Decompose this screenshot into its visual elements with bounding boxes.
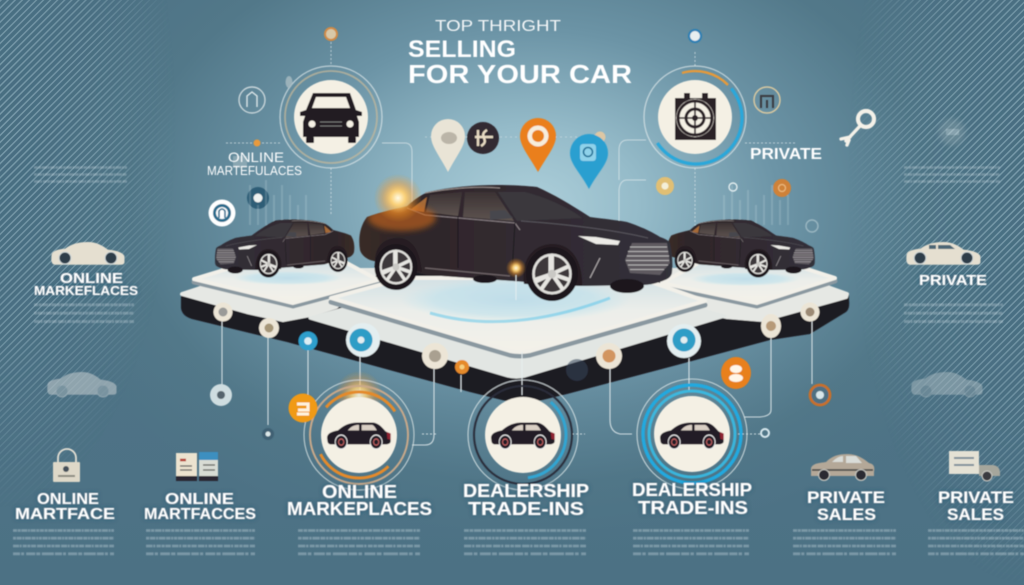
glow: rear light flare — [374, 174, 422, 222]
right-side column: PRIVATE — [919, 272, 987, 289]
title — [408, 18, 632, 89]
text column: online marketplaces 2: MARTFACCES — [144, 506, 256, 523]
title: TOP THRIGHT — [435, 18, 561, 35]
rear orange reflection — [368, 205, 436, 231]
top-right feature: dial badge — [631, 53, 761, 183]
main car — [359, 185, 672, 301]
left-side column: MARKEFLACES — [34, 283, 138, 298]
platform: left tier — [182, 262, 380, 320]
label: online marketplaces upper: ONLINE — [228, 149, 284, 165]
left-side column — [34, 168, 138, 397]
faint vertical bars behind side cars — [250, 180, 788, 225]
connector lines upper — [226, 42, 795, 235]
text column: private sales 1: PRIVATE — [807, 489, 885, 507]
pin: beige — [431, 119, 465, 172]
pin: dark round — [467, 122, 499, 154]
text column: private sales 2: SALES — [947, 506, 1004, 524]
top-left feature: car front badge — [280, 66, 382, 168]
icon: documents — [176, 452, 218, 481]
text column: dealership 1: DEALERSHIP — [463, 480, 589, 501]
faint dim disc on base — [566, 359, 588, 381]
text column: online marketplaces 2 — [144, 452, 256, 554]
icon: delivery truck — [949, 451, 1000, 481]
text column: private sales 2: PRIVATE — [938, 489, 1014, 507]
icon: hatchback — [327, 423, 391, 449]
text column: private sales 1 — [793, 454, 896, 554]
icon: beige car — [51, 242, 124, 265]
text column: dealership 2: DEALERSHIP — [632, 480, 752, 500]
pin: orange — [520, 118, 556, 172]
platform: dark base — [181, 270, 849, 405]
icon: dial — [675, 93, 716, 140]
icon: lock tag — [53, 449, 80, 482]
small upper nodes and icons — [208, 28, 818, 232]
side car right — [668, 220, 815, 278]
text column: dealership 1 — [463, 480, 589, 554]
icon: orange badge — [288, 394, 318, 422]
title: FOR YOUR CAR — [408, 59, 632, 89]
bottom circle: dealership right — [637, 379, 747, 489]
label: online marketplaces upper: MARTEFULACES — [207, 163, 302, 178]
right-side column — [904, 168, 1003, 397]
icon: faint emblem — [939, 119, 965, 145]
text column: online marketplaces 2: ONLINE — [165, 491, 234, 508]
icon: key — [841, 111, 874, 145]
title: SELLING — [408, 36, 516, 63]
icon: faded car — [47, 372, 117, 397]
lower connector lines — [222, 275, 812, 445]
icon: car front — [300, 93, 362, 143]
text column: online marketplace 1: ONLINE — [37, 491, 99, 508]
label: private upper: PRIVATE — [750, 146, 822, 163]
bottom circle: online marketplaces — [298, 371, 420, 496]
text column: online marketplaces 3: ONLINE — [322, 481, 397, 502]
pin: blue — [570, 134, 608, 189]
bottom circle: dealership centre — [462, 374, 584, 496]
text column: private sales 2 — [928, 451, 1024, 554]
side car left — [215, 220, 354, 278]
text column: online marketplace 1: MARTFACE — [15, 506, 115, 523]
text column: online marketplaces 3 — [287, 481, 432, 554]
text column: private sales 1: SALES — [817, 506, 876, 524]
text column: dealership 1: TRADE-INS — [468, 498, 584, 519]
icon: hatchback — [660, 423, 724, 449]
platform: main tier — [310, 278, 725, 377]
left-side column: ONLINE — [60, 270, 123, 287]
icon: faded car right — [911, 372, 983, 397]
glow: spot light on door — [506, 258, 526, 278]
label: online marketplaces upper — [207, 149, 302, 178]
text column: online marketplaces 3: MARKEPLACES — [287, 499, 432, 519]
text column: dealership 2: TRADE-INS — [638, 498, 748, 518]
text column: dealership 2 — [632, 480, 752, 554]
icon: tan car — [811, 454, 874, 480]
icon: beige car right — [906, 242, 980, 265]
platform: right tier — [650, 262, 847, 320]
node dots — [210, 302, 830, 440]
icon: hatchback — [491, 423, 555, 449]
platforms — [181, 262, 849, 405]
text column: online marketplace 1 — [13, 449, 115, 554]
map pins — [431, 118, 608, 189]
